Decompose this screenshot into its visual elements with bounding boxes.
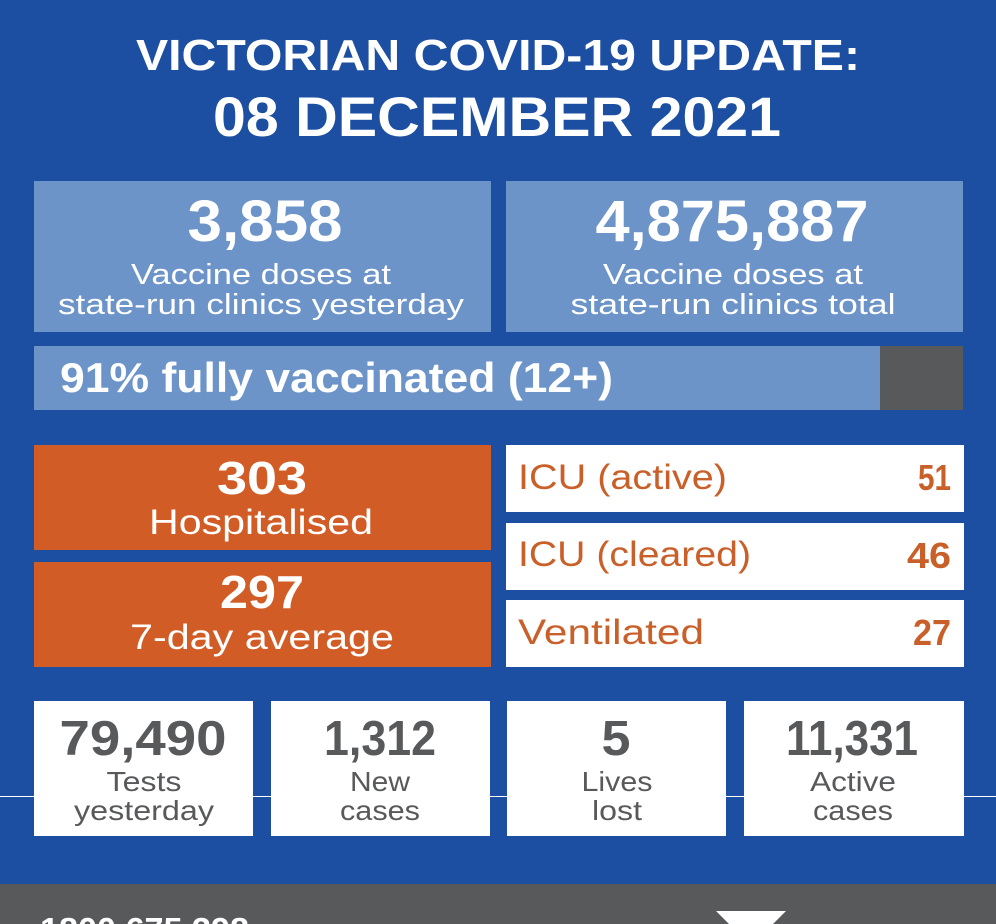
panel: doses total: state-run clinics total (570, 289, 896, 321)
panel: hospitalised: 303 (217, 452, 307, 504)
row: ventilated (506, 600, 964, 667)
panel: doses total (506, 181, 963, 332)
stat: tests: 79,490 (60, 712, 226, 766)
row: ICU active: 51 (918, 457, 951, 498)
stat: new cases: 1,312 (324, 712, 436, 766)
stat: lives lost: Lives (582, 766, 652, 797)
stat: active cases (744, 701, 964, 836)
panel: doses yesterday: 3,858 (188, 189, 342, 254)
title (136, 31, 860, 148)
row: ICU cleared (506, 523, 964, 590)
stat: lives lost (507, 701, 726, 836)
row: ICU cleared: ICU (cleared) (518, 535, 751, 574)
panel: doses yesterday: state-run clinics yesterday (58, 289, 465, 321)
panel: 7-day average: 297 (220, 566, 304, 618)
footer band (0, 884, 996, 924)
stat: active cases: cases (813, 795, 893, 826)
stat: new cases: cases (340, 795, 420, 826)
panel: 7-day average: 7-day average (130, 618, 394, 657)
panel: doses yesterday: Vaccine doses at (131, 259, 391, 291)
panel: 7-day average (34, 562, 491, 667)
panel: hospitalised: Hospitalised (149, 503, 373, 542)
progress bar: fully vaccinated: 91% fully vaccinated (12+) (60, 354, 613, 401)
title: VICTORIAN COVID-19 UPDATE: (136, 31, 860, 80)
icon: Victoria logo triangle (716, 911, 786, 924)
stat: active cases: 11,331 (786, 712, 918, 766)
stat: active cases: Active (810, 766, 896, 797)
panel: doses total: Vaccine doses at (603, 259, 863, 291)
stat: new cases (271, 701, 490, 836)
title: 08 DECEMBER 2021 (213, 85, 781, 148)
stat: lives lost: 5 (602, 712, 630, 766)
stat: new cases: New (350, 766, 411, 797)
row: ICU active (506, 445, 964, 512)
stat: lives lost: lost (592, 795, 642, 826)
row: ventilated: Ventilated (518, 613, 704, 652)
panel: doses total: 4,875,887 (596, 189, 868, 254)
row: ICU cleared: 46 (907, 535, 951, 576)
row: ventilated: 27 (913, 612, 951, 653)
panel: hospitalised (34, 445, 491, 550)
stat: tests: Tests (106, 766, 182, 797)
row: ICU active: ICU (active) (518, 458, 727, 497)
stat: tests (34, 701, 253, 836)
progress bar: fully vaccinated (34, 346, 963, 410)
stat: tests: yesterday (74, 795, 214, 826)
panel: doses yesterday (34, 181, 491, 332)
